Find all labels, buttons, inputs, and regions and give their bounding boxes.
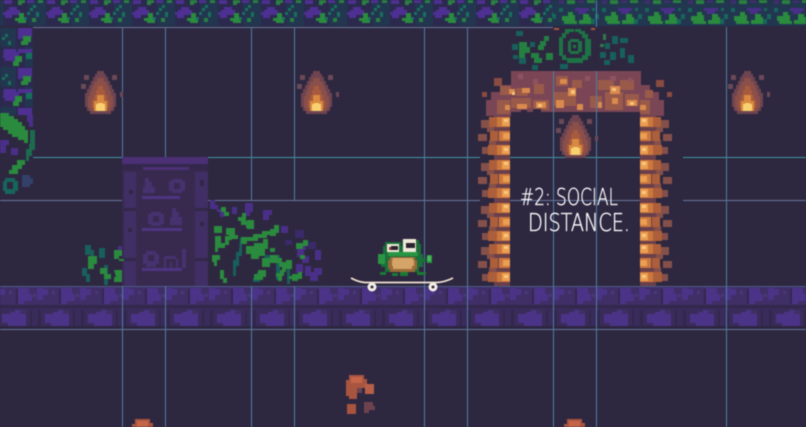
frog on skateboard xyxy=(351,239,453,292)
left wall vines xyxy=(0,28,35,194)
large bush xyxy=(210,200,322,284)
sparks xyxy=(482,78,672,97)
left bush xyxy=(82,245,124,285)
falling rock left xyxy=(132,419,153,427)
floor bricks xyxy=(0,286,806,329)
stone tablet panel xyxy=(122,157,208,286)
falling rock centre xyxy=(346,375,375,414)
caption line 2: DISTANCE. xyxy=(528,208,630,237)
torch 3 xyxy=(728,71,770,114)
brick archway xyxy=(478,71,672,286)
caption xyxy=(520,185,630,237)
torch 1 xyxy=(81,71,123,114)
right pillar xyxy=(640,116,672,286)
caption line 1: #2: SOCIAL xyxy=(520,185,618,211)
arch top vines xyxy=(512,28,634,70)
falling rock right xyxy=(564,419,585,427)
torch 4 in arch xyxy=(556,115,598,158)
frog xyxy=(378,239,432,276)
skateboard xyxy=(351,278,453,292)
left pillar xyxy=(478,116,510,286)
torch 2 xyxy=(297,71,339,114)
ceiling foliage strip xyxy=(0,0,806,27)
shelf glyphs xyxy=(142,178,186,271)
arch lintel xyxy=(486,71,664,116)
